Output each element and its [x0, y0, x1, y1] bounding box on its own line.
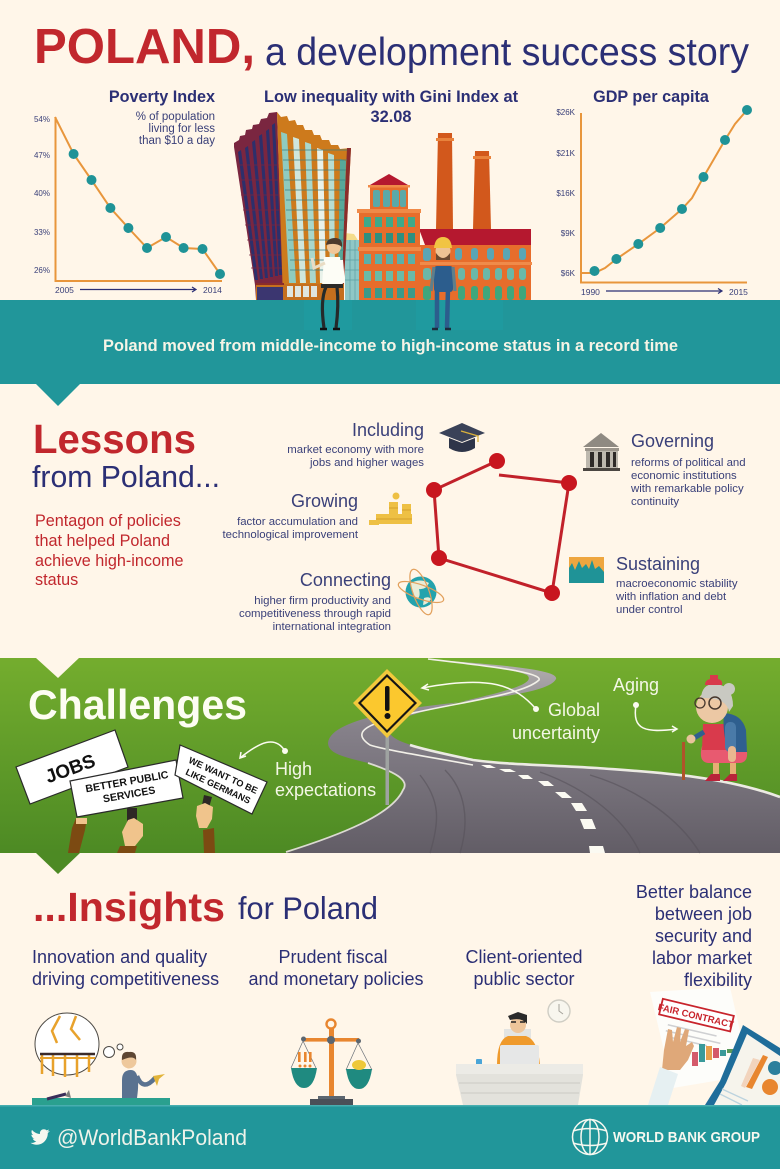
heading: insights [33, 884, 378, 930]
label: high expectations: expectations [275, 780, 376, 800]
gdp axis labels: $9K [561, 229, 576, 238]
banner: record time [0, 300, 780, 406]
factory hall [419, 245, 531, 300]
heading: challenges: Challenges [28, 681, 247, 728]
insight: fiscal policies: Prudent fiscal [278, 947, 388, 967]
text: handle: @WorldBankPoland [57, 1125, 247, 1150]
illustration: office tower [234, 112, 351, 300]
icon: globe [396, 567, 446, 617]
tower base [256, 284, 344, 300]
title: a development success story [265, 31, 749, 74]
poverty dots [69, 149, 225, 279]
gdp time axis [581, 287, 748, 297]
policy: growing [222, 491, 412, 541]
sign: jobs: JOBS [43, 751, 98, 788]
policy: including: Including [352, 420, 424, 440]
heading: gini index: Low inequality with Gini Index at [264, 88, 519, 106]
gdp axis labels: $21K [556, 149, 576, 158]
insight: job security: security and [655, 926, 752, 946]
gdp axis labels: $6K [561, 269, 576, 278]
poverty axis labels [34, 115, 50, 275]
poverty axis labels: 26% [34, 266, 50, 275]
poverty axis labels: 33% [34, 228, 50, 237]
label: high expectations: High [275, 759, 312, 779]
insight: public sector: public sector [473, 969, 575, 989]
poverty time axis [55, 285, 222, 295]
gdp time axis: 2015 [729, 287, 748, 297]
illustration: glass building [345, 233, 361, 300]
policy: governing: continuity [631, 496, 679, 508]
sign: jobs [16, 730, 128, 804]
label: aging [613, 675, 677, 732]
title [34, 19, 749, 74]
illustration: robot thought [32, 1013, 170, 1106]
logo: world bank group [572, 1120, 760, 1154]
insight: job security [636, 882, 780, 1105]
policy: connecting: Connecting [300, 570, 391, 590]
gdp time axis: 1990 [581, 287, 600, 297]
icon: twitter bird [31, 1129, 50, 1145]
poverty time axis: 2014 [203, 285, 222, 295]
insight: job security: Better balance [636, 882, 752, 902]
pentagon diagram [426, 453, 577, 601]
footer [0, 1105, 780, 1169]
policy: connecting: competitiveness through rapid [239, 608, 391, 620]
tower side face [234, 112, 286, 300]
policy: governing: with remarkable policy [630, 483, 744, 495]
sign: better public services [70, 760, 183, 817]
heading: gdp: GDP per capita [593, 88, 710, 106]
policy: connecting [239, 567, 446, 633]
old woman [682, 675, 747, 781]
label: global uncertainty: uncertainty [512, 723, 600, 743]
gdp axis labels: $26K [556, 108, 576, 117]
gdp dots [590, 105, 752, 276]
poverty axis labels: 40% [34, 189, 50, 198]
policy: including: market economy with more [287, 444, 424, 456]
heading: poverty index: Poverty Index [109, 88, 215, 106]
heading: insights: ...Insights [33, 884, 225, 930]
policy: sustaining: under control [616, 604, 682, 616]
label: aging: Aging [613, 675, 659, 695]
text: pentagon of policies: status [35, 571, 78, 589]
heading: lessons [32, 416, 220, 494]
icon: coins [369, 492, 412, 525]
banner: record time: Poland moved from middle-income to high-income status in a record time [103, 337, 678, 355]
sign: we want to be like germans: LIKE GERMANS [184, 767, 252, 806]
tower front face [277, 112, 351, 300]
label: high expectations [240, 742, 376, 800]
insight: innovation: driving competitiveness [32, 969, 219, 989]
heading: gini index: 32.08 [370, 108, 412, 126]
arms [68, 795, 215, 853]
label: global uncertainty [422, 682, 600, 743]
protest signs [16, 730, 267, 853]
policy: sustaining: Sustaining [616, 554, 700, 574]
policy: governing: Governing [631, 431, 714, 451]
title: POLAND, [34, 19, 255, 74]
gdp axis labels: $16K [556, 189, 576, 198]
insight: job security: between job [655, 904, 752, 924]
line chart: poverty index [34, 88, 225, 295]
icon: bars [569, 557, 604, 583]
policy: including: jobs and higher wages [309, 457, 424, 469]
line chart: gdp per capita [556, 88, 752, 297]
poverty line [55, 117, 220, 274]
icon: mortarboard [439, 423, 485, 452]
insight: public sector [456, 947, 583, 1105]
illustration: factory worker [431, 237, 455, 329]
policy: sustaining [569, 554, 738, 616]
text: poverty definition: than $10 a day [139, 135, 215, 147]
policy: growing: Growing [291, 491, 358, 511]
policy: connecting: international integration [273, 621, 391, 633]
illustration: fair contract: FAIR CONTRACT [657, 1002, 735, 1031]
policy: including [287, 420, 485, 469]
sign: we want to be like germans: WE WANT TO BE [187, 755, 259, 796]
insight: public sector: Client-oriented [465, 947, 583, 967]
gdp line [581, 110, 747, 273]
panel: challenges [0, 658, 780, 874]
illustration: fair contract [648, 987, 780, 1105]
heading: lessons: Lessons [33, 416, 196, 462]
policy: connecting: higher firm productivity and [254, 595, 391, 607]
factory tower and roof [370, 186, 408, 209]
policy: sustaining: macroeconomic stability [616, 578, 738, 590]
text: pentagon of policies: Pentagon of policies [35, 512, 181, 530]
policy: governing: economic institutions [631, 470, 737, 482]
illustration: scales [291, 1020, 372, 1105]
policy: governing [583, 431, 746, 508]
policy: growing: technological improvement [222, 529, 359, 541]
poverty axis labels: 54% [34, 115, 50, 124]
road [286, 659, 780, 853]
insight: job security: flexibility [684, 970, 752, 990]
text: pentagon of policies: that helped Poland [35, 532, 170, 550]
illustration: factory [357, 133, 532, 300]
chimneys [436, 133, 491, 229]
text: poverty definition: living for less [149, 123, 215, 135]
label: global uncertainty: Global [548, 700, 600, 720]
logo: world bank group: WORLD BANK GROUP [613, 1129, 760, 1146]
poverty time axis: 2005 [55, 285, 74, 295]
sign: better public services: SERVICES [102, 784, 156, 805]
illustration: clerk at desk [456, 1000, 583, 1105]
heading: lessons: from Poland... [32, 459, 220, 494]
text: pentagon of policies: achieve high-income [35, 552, 183, 570]
insight: fiscal policies [248, 947, 424, 1105]
policy: growing: factor accumulation and [237, 516, 358, 528]
icon: bank [583, 433, 620, 471]
policy: sustaining: with inflation and debt [615, 591, 727, 603]
gdp axis labels [556, 108, 576, 278]
sign: better public services: BETTER PUBLIC [85, 769, 170, 795]
poverty axis labels: 47% [34, 151, 50, 160]
insight: job security: labor market [652, 948, 752, 968]
insight: fiscal policies: and monetary policies [248, 969, 424, 989]
policy: governing: reforms of political and [631, 457, 746, 469]
warning sign [353, 669, 422, 805]
factory main block [359, 212, 420, 300]
insight: innovation [32, 947, 219, 1106]
sign: we want to be like germans [175, 745, 267, 814]
heading: insights: for Poland [238, 890, 378, 926]
text: poverty definition: % of population [136, 111, 215, 123]
road dashes [481, 765, 605, 853]
illustration: office worker [312, 238, 343, 329]
insight: innovation: Innovation and quality [32, 947, 207, 967]
